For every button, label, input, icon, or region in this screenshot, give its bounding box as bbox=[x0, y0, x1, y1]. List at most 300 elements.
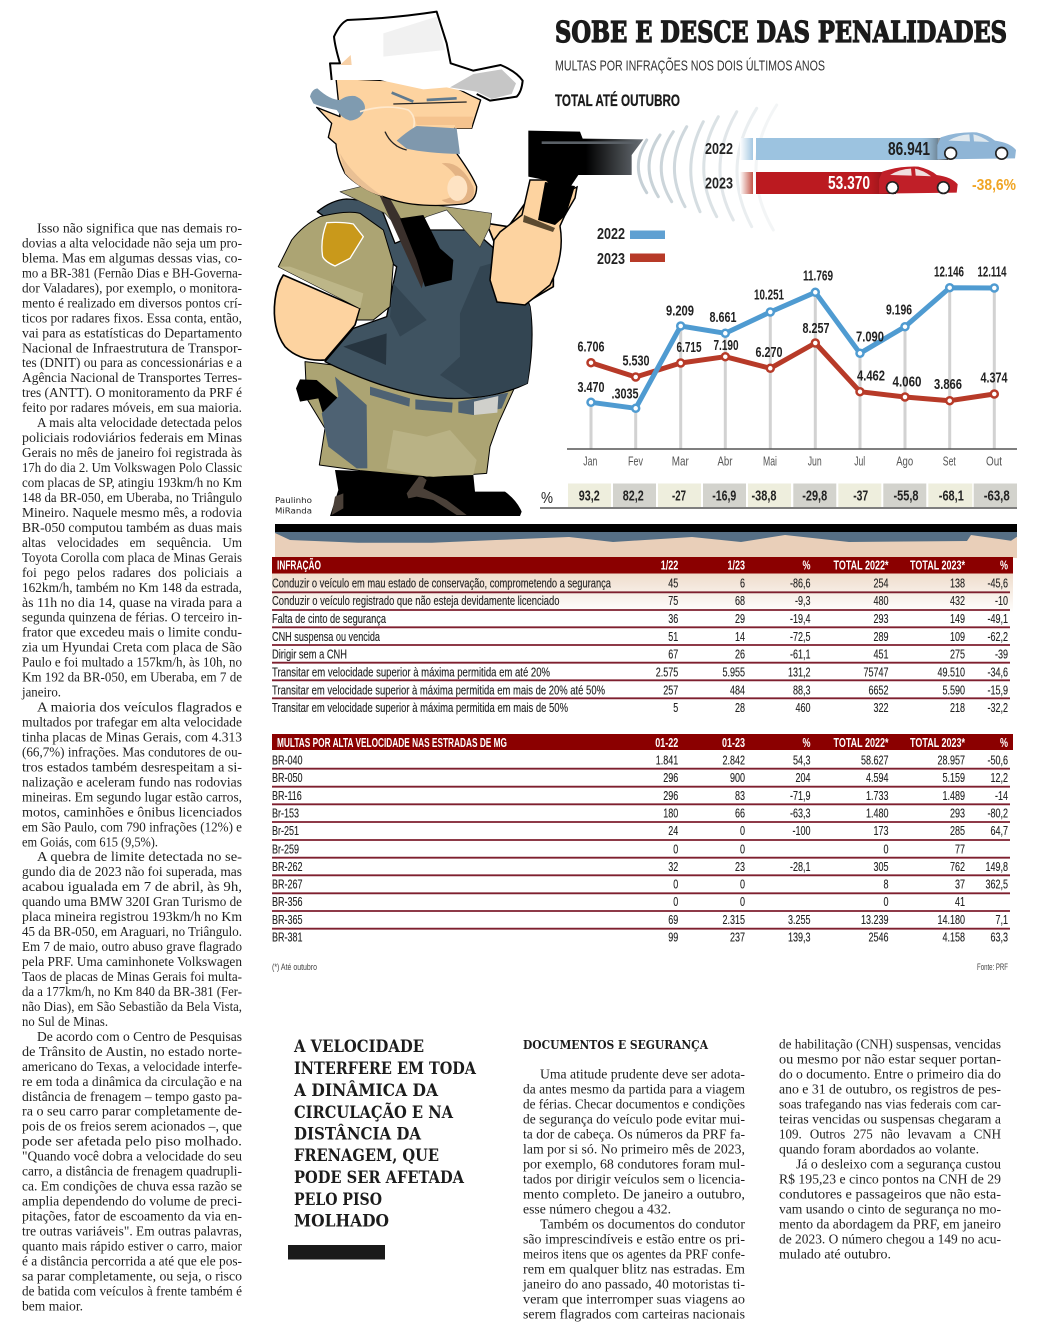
data labels: 4.060 bbox=[892, 374, 922, 390]
row values: 26 bbox=[735, 648, 745, 662]
body text: right column: ou mesmo por não estar sequer portan- bbox=[779, 1052, 1001, 1066]
highway values: 762 bbox=[950, 860, 965, 874]
body text: left column: feito por radares móveis, em sua maioria. bbox=[22, 400, 242, 415]
highway rows: Br-251 bbox=[272, 825, 299, 838]
highway values: 64,7 bbox=[991, 825, 1008, 838]
table header bbox=[272, 557, 1013, 574]
source: Fonte: PRF bbox=[977, 962, 1008, 973]
body text: left column bbox=[21, 220, 243, 1313]
body text: left column: De acordo com o Centro de Pesquisas bbox=[37, 1029, 242, 1044]
percent variation row: -55,8 bbox=[894, 488, 918, 504]
body text: left column: da a 177km/h, no Km 840 da BR-381 (Fer- bbox=[22, 984, 242, 999]
table header: TOTAL 2023* bbox=[910, 736, 966, 750]
body text: left column: em São Paulo, com 790 infrações (12%) e bbox=[22, 819, 242, 834]
month labels: Abr bbox=[718, 454, 732, 468]
table header: TOTAL 2023* bbox=[910, 559, 966, 573]
highway values: 3.255 bbox=[788, 914, 811, 927]
highway rows: BR-050 bbox=[272, 772, 302, 785]
month labels: Jun bbox=[808, 454, 822, 468]
icon: nose and cheek highlight bbox=[447, 176, 467, 201]
illustration: highway patrol officer bbox=[274, 12, 553, 516]
pull quote: A DINÂMICA DA bbox=[293, 1080, 439, 1101]
row values: 451 bbox=[873, 648, 888, 662]
icon: boots bbox=[330, 470, 522, 516]
highway rows: BR-262 bbox=[272, 860, 302, 874]
table header: % bbox=[803, 736, 811, 750]
icon: trousers bbox=[305, 362, 515, 477]
row values: 218 bbox=[950, 702, 965, 715]
percent variation row bbox=[540, 484, 1017, 508]
icon: sleeve and collar bbox=[278, 184, 492, 320]
highway values: 0 bbox=[740, 896, 745, 909]
row values: 480 bbox=[873, 595, 888, 608]
body text: left column: Agência Nacional de Transportes Terres- bbox=[22, 370, 242, 385]
body text: left column: Toyota Corolla com placa de Minas Gerais bbox=[22, 550, 242, 565]
body text: left column: quando uma BMW 320I Gran Turismo de bbox=[22, 894, 242, 909]
body text: left column: placa mineira registrou 193km/h no Km bbox=[22, 909, 243, 924]
row values: 14 bbox=[735, 631, 745, 644]
row values: 67 bbox=[668, 648, 678, 662]
body text: middle column: Também os documentos do condutor bbox=[540, 1216, 746, 1232]
month labels: Mar bbox=[672, 454, 689, 468]
body text: middle column: de férias. Checar documentos e condições bbox=[523, 1096, 745, 1112]
body text: middle column: mento completo. De janeiro a outubro, bbox=[523, 1186, 745, 1202]
line chart: monthly fines bbox=[567, 264, 1017, 468]
row values: -72,5 bbox=[790, 631, 811, 644]
body text: right column: condutores e passageiros que não esta- bbox=[779, 1186, 1001, 1202]
body text: middle column: tados por dirigir veículos sem o licencia- bbox=[523, 1172, 745, 1186]
row values: -45,6 bbox=[988, 577, 1008, 591]
subtitle: MULTAS POR INFRAÇÕES NOS DOIS ÚLTIMOS ANOS bbox=[555, 58, 825, 74]
pull quote: DISTÂNCIA DA bbox=[294, 1124, 422, 1144]
highway values: 296 bbox=[663, 772, 678, 785]
body text: left column: Km 192 da BR-050, em Uberaba, em 7 de bbox=[22, 670, 242, 685]
body text: middle column: Uma atitude prudente deve ser adota- bbox=[540, 1066, 745, 1082]
highway values: 2546 bbox=[868, 931, 888, 945]
series 2023 bbox=[588, 340, 998, 404]
body text: left column: foi pego pelos radares dos policiais a bbox=[22, 565, 242, 580]
highway values: 23 bbox=[735, 860, 745, 874]
body text: left column: Nacional de Infraestrutura de Transpor- bbox=[22, 340, 242, 355]
body text: left column: mineiras. Em segundo lugar estão carros, bbox=[22, 789, 242, 804]
data labels: 8.257 bbox=[802, 321, 830, 337]
credit: illustrator bbox=[275, 496, 312, 516]
pull quote: PODE SER AFETADA bbox=[294, 1168, 465, 1188]
icon: left arm bbox=[274, 275, 360, 360]
footnote: (*) Até outubro bbox=[272, 962, 317, 973]
body text: left column: blema. Mas em algumas dessas vias, co- bbox=[22, 250, 242, 265]
row values: -19,4 bbox=[790, 613, 811, 626]
body text: middle column: são imprescindíveis e estão entre os pri- bbox=[523, 1232, 745, 1246]
highway values: 0 bbox=[740, 825, 745, 838]
highway rows: BR-381 bbox=[272, 931, 302, 945]
table header: TOTAL 2022* bbox=[834, 559, 889, 573]
data labels: 9.196 bbox=[886, 302, 912, 318]
highway values: 37 bbox=[955, 878, 965, 892]
data labels bbox=[578, 264, 1008, 402]
data labels: 11.769 bbox=[803, 268, 833, 284]
body text: left column: Paulo e foi multado a 157km/h, às 10h, no bbox=[22, 655, 242, 670]
row values: 5.590 bbox=[943, 684, 965, 698]
percent variation row: -29,8 bbox=[802, 488, 827, 504]
body text: left column: ra o seu carro parar completamente de- bbox=[22, 1104, 242, 1119]
highway values: 204 bbox=[796, 772, 811, 785]
highway values: 2.842 bbox=[722, 754, 745, 768]
icon: right arm bbox=[487, 187, 553, 302]
data labels: 6.270 bbox=[756, 345, 782, 361]
body text: left column: é a distância percorrida a até que ele pos- bbox=[22, 1253, 242, 1268]
body text: left column: BR-050 computou também as duas mais bbox=[22, 520, 242, 535]
radar waves bbox=[638, 105, 777, 230]
body text: left column: com placas de SP, atingiu 193km/h no Km bbox=[22, 475, 243, 490]
icon: blue car bbox=[937, 132, 1016, 160]
body text: left column: A mais alta velocidade detectada pelos bbox=[37, 415, 242, 430]
section heading: documents and safety: DOCUMENTOS E SEGURANÇA bbox=[523, 1038, 709, 1052]
body text: left column: tros estados também desrespeitam a si- bbox=[22, 759, 242, 774]
row labels: Transitar em velocidade superior à máxima permitida em mais de 50% bbox=[272, 701, 568, 715]
highway values: 63,3 bbox=[991, 931, 1008, 945]
icon: red car bbox=[879, 167, 958, 194]
highway values: 83 bbox=[735, 790, 745, 803]
pull quote: MOLHADO bbox=[294, 1212, 389, 1232]
table header: % bbox=[1000, 559, 1008, 573]
highway values: 41 bbox=[955, 896, 965, 909]
row values: 2.575 bbox=[656, 666, 678, 680]
table header: 01-23 bbox=[722, 736, 745, 750]
body text: right column: Já o desleixo com a segurança custou bbox=[796, 1156, 1001, 1172]
body text: right column: 109. Outros 275 não levavam a CNH bbox=[779, 1126, 1001, 1142]
variation: total percent: -38,6% bbox=[972, 177, 1016, 194]
percent variation row: -16,9 bbox=[712, 488, 736, 504]
row values: 254 bbox=[873, 577, 888, 591]
body text: left column: zia um Hyundai Creta com placa de São bbox=[22, 640, 242, 655]
data labels: 10.251 bbox=[754, 288, 784, 304]
highway values: 0 bbox=[673, 878, 678, 892]
highway values: 173 bbox=[873, 825, 888, 838]
month labels: Fev bbox=[628, 454, 644, 468]
data labels: 4.462 bbox=[857, 368, 885, 384]
body text: left column: sa parar completamente, ou seja, o risco bbox=[22, 1268, 242, 1283]
highway values: 180 bbox=[663, 807, 678, 821]
bar: total 2023: 2023 bbox=[705, 176, 733, 192]
body text: left column: 162km/h, também no Km 148 da estrada, bbox=[22, 580, 242, 595]
icon: forearm and hand holding radar bbox=[490, 180, 577, 305]
highway values: 237 bbox=[730, 931, 745, 945]
highway values: 0 bbox=[883, 843, 888, 857]
body text: middle column: rem em qualquer blitz nas estradas. Em bbox=[523, 1262, 746, 1276]
row labels: Conduzir o veículo em mau estado de conservação, comprometendo a segurança bbox=[272, 576, 611, 590]
highway values: 32 bbox=[668, 860, 678, 874]
credit: illustrator: MiRanda bbox=[275, 506, 312, 516]
row values: 28 bbox=[735, 702, 745, 715]
body text: left column: mo a BR-381 (Fernão Dias e BH-Governa- bbox=[22, 265, 242, 280]
bar: total 2022: 86.941 bbox=[888, 139, 930, 159]
highway values: 0 bbox=[740, 878, 745, 892]
pull quote: CIRCULAÇÃO E NA bbox=[294, 1101, 454, 1123]
highway values: 5.159 bbox=[943, 772, 965, 785]
table header bbox=[272, 734, 1013, 750]
body text: left column: multados por trafegar em alta velocidade bbox=[22, 714, 242, 730]
row values: 149 bbox=[950, 613, 965, 626]
body text: middle column: serem flagrados com carteiras nacionais bbox=[523, 1306, 745, 1322]
body text: left column: dovias a alta velocidade não seja um pro- bbox=[22, 236, 242, 250]
highway rows: BR-356 bbox=[272, 896, 302, 909]
highway rows: BR-116 bbox=[272, 790, 302, 803]
row labels: Transitar em velocidade superior à máxima permitida em mais de 20% até 50% bbox=[272, 684, 605, 698]
highway values: 2.315 bbox=[722, 914, 745, 927]
table: fines by infraction bbox=[272, 557, 1013, 715]
table header: INFRAÇÃO bbox=[277, 558, 321, 572]
highway values: 0 bbox=[673, 843, 678, 857]
body text: left column: re em toda a dinâmica da circulação e na bbox=[22, 1074, 242, 1089]
body text: left column: janeiro. bbox=[21, 685, 61, 700]
body text: right column: ano e 31 de outubro, os registros de pes- bbox=[779, 1082, 1001, 1096]
body text: left column: gundo dia de 2023 não foi superada, mas bbox=[22, 864, 242, 879]
row values: -9,3 bbox=[795, 595, 811, 608]
body text: left column: pitações, fator de escoamento da via en- bbox=[22, 1208, 242, 1224]
highway values: 12,2 bbox=[991, 772, 1008, 785]
highway values: -14 bbox=[995, 790, 1008, 803]
highway values: 24 bbox=[668, 825, 678, 838]
body text: left column: Isso não significa que nas demais ro- bbox=[37, 220, 242, 236]
highway rows bbox=[272, 754, 302, 945]
body text: left column: tinha placas de Minas Gerais, com 4.313 bbox=[22, 730, 242, 744]
pull quote: A VELOCIDADE bbox=[293, 1037, 424, 1057]
percent variation row: -63,8 bbox=[984, 488, 1010, 504]
body text: left column: vai para as estatísticas do Departamento bbox=[22, 325, 242, 340]
body text: middle column: da antes mesmo da partida para a viagem bbox=[523, 1082, 746, 1096]
highway values: 14.180 bbox=[938, 914, 965, 927]
body text: left column: pela PRF. Uma caminhonete Volkswagen bbox=[22, 954, 242, 969]
body text: right column: do o documento. Entre o primeiro dia do bbox=[779, 1066, 1001, 1082]
body text: right column: R$ 195,23 e cinco pontos na CNH de 29 bbox=[779, 1172, 1001, 1186]
body text: left column: às 11h no dia 14, quase na virada para a bbox=[22, 595, 242, 610]
row values: -10 bbox=[995, 595, 1008, 608]
body text: left column: tes (DNIT) ou para as concessionárias e a bbox=[22, 355, 242, 370]
percent variation row: -37 bbox=[853, 488, 868, 504]
row values bbox=[656, 577, 1008, 715]
table header: % bbox=[1000, 736, 1008, 750]
highway rows: BR-267 bbox=[272, 878, 302, 892]
body text: left column: frator que excedeu mais o limite condu- bbox=[22, 625, 242, 640]
row values: -49,1 bbox=[988, 613, 1008, 626]
body text: left column: nalização e aceleram fundo nas rodovias bbox=[22, 774, 242, 789]
row values: 275 bbox=[950, 648, 965, 662]
highway values: 99 bbox=[668, 931, 678, 945]
row labels: Dirigir sem a CNH bbox=[272, 648, 347, 662]
row values: 293 bbox=[873, 613, 888, 626]
highway rows: Br-259 bbox=[272, 843, 299, 857]
highway values: 305 bbox=[873, 860, 888, 874]
data labels: 7.190 bbox=[714, 338, 738, 354]
table: speeding fines by highway bbox=[272, 734, 1013, 945]
icon: radar gun bbox=[528, 131, 643, 195]
highway values: 296 bbox=[663, 790, 678, 803]
data labels: 7.090 bbox=[856, 330, 884, 346]
table header: TOTAL 2022* bbox=[834, 736, 889, 750]
percent variation row: 82,2 bbox=[623, 488, 644, 504]
body text: middle column bbox=[522, 1066, 746, 1322]
body text: middle column: veram que interromper suas viagens ao bbox=[523, 1292, 745, 1306]
highway values: 28.957 bbox=[938, 754, 965, 768]
row values: 5 bbox=[673, 702, 678, 715]
body text: right column: mulado até outubro. bbox=[779, 1246, 891, 1262]
chart legend: 2022 bbox=[597, 226, 625, 243]
body text: middle column: ta dor de cabeça. Os números da PRF fa- bbox=[523, 1126, 745, 1142]
data labels: 12.146 bbox=[934, 264, 964, 280]
row values: 88,3 bbox=[793, 684, 811, 698]
highway values: 1.480 bbox=[866, 807, 888, 821]
highway values: -71,9 bbox=[790, 790, 811, 803]
body text: left column: 148 da BR-050, em Uberaba, no Triângulo bbox=[22, 490, 242, 505]
body text: middle column: lam por si só. No primeiro mês de 2023, bbox=[523, 1142, 745, 1156]
pull quote bbox=[288, 1037, 477, 1260]
row values: 29 bbox=[735, 613, 745, 626]
body text: left column: distância de frenagem – tempo gasto pa- bbox=[22, 1089, 242, 1104]
data labels: 3.470 bbox=[578, 380, 604, 396]
body text: left column: carro, a distância de frenagem quadrupli- bbox=[22, 1164, 242, 1179]
row labels: Falta de cinto de segurança bbox=[272, 612, 386, 626]
highway values: 0 bbox=[740, 843, 745, 857]
highway values: 7,1 bbox=[996, 914, 1008, 927]
row values: -15,9 bbox=[988, 684, 1008, 698]
decorative road band bbox=[275, 524, 1017, 558]
row values: -61,1 bbox=[790, 648, 811, 662]
body text: left column: pois de os freios serem acionados –, que bbox=[22, 1119, 242, 1134]
body text: left column: amplia dependendo do volume de preci- bbox=[22, 1194, 242, 1209]
highway values: 8 bbox=[883, 878, 888, 892]
body text: right column: mento da abordagem da PRF, em janeiro bbox=[779, 1216, 1001, 1232]
row labels: Conduzir o veículo registrado que não esteja devidamente licenciado bbox=[272, 594, 560, 608]
row values: 6 bbox=[740, 577, 745, 591]
body text: left column: pode ser afetada pelo piso molhado. bbox=[22, 1134, 242, 1149]
highway values: -100 bbox=[793, 825, 811, 838]
highway values: 293 bbox=[950, 807, 965, 821]
body text: right column bbox=[779, 1036, 1001, 1262]
highway values: 69 bbox=[668, 914, 678, 927]
body text: left column: no Sul de Minas. bbox=[22, 1014, 108, 1029]
body text: left column: (66,7%) infrações. Mas condutores de ou- bbox=[22, 744, 242, 760]
credit: illustrator: Paulinho bbox=[275, 496, 312, 505]
body text: left column: Em 7 de maio, outro abuso grave flagrado bbox=[22, 939, 242, 954]
body text: left column: Gerais no mês de janeiro foi registrada às bbox=[22, 445, 242, 460]
month labels: Mai bbox=[763, 454, 777, 468]
chart legend: 2023 bbox=[597, 251, 625, 268]
body text: middle column: meiros itens que os agentes da PRF confe- bbox=[523, 1246, 745, 1262]
percent variation row: -68,1 bbox=[939, 488, 964, 504]
row values: 5.955 bbox=[722, 666, 745, 680]
highway values: 13.239 bbox=[861, 914, 888, 927]
highway values: -28,1 bbox=[790, 860, 811, 874]
row labels: Transitar em velocidade superior à máxima permitida em até 20% bbox=[272, 666, 550, 680]
row values: -32,2 bbox=[988, 702, 1008, 715]
month labels: Set bbox=[943, 454, 956, 468]
row values: 36 bbox=[668, 613, 678, 626]
month labels: Jul bbox=[854, 454, 865, 468]
icon: holster and pistol bbox=[296, 377, 367, 468]
highway values: 0 bbox=[673, 896, 678, 909]
row values: 6652 bbox=[868, 684, 888, 698]
pull quote bar bbox=[288, 1245, 385, 1260]
row values: 322 bbox=[873, 702, 888, 715]
highway values: 1.841 bbox=[656, 754, 678, 768]
row values: 75747 bbox=[863, 666, 888, 680]
data labels: 6.715 bbox=[676, 340, 702, 356]
body text: right column: teiras vencidas ou suspensas chegaram a bbox=[779, 1112, 1001, 1126]
row values: 75 bbox=[668, 595, 678, 608]
body text: left column: Taos de placas de Minas Gerais foi multa- bbox=[22, 969, 242, 984]
data labels: 3.866 bbox=[934, 377, 962, 393]
body text: left column: ca. Em condições de chuva essa razão se bbox=[22, 1179, 242, 1194]
highway values: -80,2 bbox=[988, 807, 1008, 821]
highway values: 900 bbox=[730, 772, 745, 785]
data labels: .3035 bbox=[612, 386, 638, 402]
table header: 1/23 bbox=[727, 559, 745, 573]
body text: left column: policiais rodoviários federais em Minas bbox=[22, 430, 242, 445]
row values: -39 bbox=[995, 648, 1008, 662]
highway values: 139,3 bbox=[788, 931, 811, 945]
data labels: 6.706 bbox=[578, 340, 604, 356]
body text: left column: 17h do dia 2. Um Volkswagen Polo Classic bbox=[22, 460, 242, 475]
row values: 257 bbox=[663, 684, 678, 698]
highway rows: BR-040 bbox=[272, 754, 302, 768]
icon: head bbox=[317, 78, 481, 205]
row values: 484 bbox=[730, 684, 745, 698]
body text: left column: tres (ANTT). O monitoramento da PRF é bbox=[22, 385, 242, 400]
icon: glasses arm bbox=[360, 107, 414, 128]
pull quote: FRENAGEM, QUE bbox=[294, 1146, 439, 1166]
body text: left column: Mineiro. Naquele mesmo mês, a rodovia bbox=[22, 505, 242, 520]
row values: 432 bbox=[950, 595, 965, 608]
bar: total 2023 bbox=[705, 167, 1016, 194]
highway values: 1.489 bbox=[943, 790, 965, 803]
body text: right column: vam usando o cinto de segurança no mo- bbox=[779, 1202, 1001, 1216]
body text: left column: A quebra de limite detectada no se- bbox=[37, 849, 242, 864]
month labels bbox=[583, 454, 1002, 468]
body text: left column: acabou igualada em 7 de abril, às 9h, bbox=[22, 879, 242, 894]
highway values: -50,6 bbox=[988, 754, 1008, 768]
row values: 68 bbox=[735, 595, 745, 608]
body text: right column: soas trafegando nas vias federais com car- bbox=[779, 1096, 1001, 1112]
row labels bbox=[272, 576, 611, 715]
bar: total 2022: 2022 bbox=[705, 141, 733, 158]
month labels: Ago bbox=[896, 454, 913, 468]
body text: left column: tre outras variáveis". Em outras palavras, bbox=[22, 1224, 242, 1238]
bar: total 2023: 53.370 bbox=[828, 173, 870, 193]
highway values: 58.627 bbox=[861, 754, 888, 768]
highway values: 66 bbox=[735, 807, 745, 821]
body text: middle column: esse número chegou a 432. bbox=[523, 1202, 671, 1216]
chart legend bbox=[597, 226, 665, 268]
icon: radio bbox=[371, 174, 453, 288]
highway values: 149,8 bbox=[986, 860, 1008, 874]
icon: belt bbox=[370, 387, 508, 415]
highway values: -63,3 bbox=[790, 807, 811, 821]
data labels: 4.374 bbox=[980, 370, 1008, 386]
highway values: 77 bbox=[955, 843, 965, 857]
row values: 45 bbox=[668, 577, 678, 591]
body text: right column: de 2023. O número chegou a 149 no acu- bbox=[779, 1232, 1001, 1246]
percent variation row: 93,2 bbox=[579, 488, 600, 504]
table header: 1/22 bbox=[661, 559, 678, 573]
percent variation row: -38,8 bbox=[752, 488, 776, 504]
body text: middle column: de segurança do veículo pode evitar mui- bbox=[523, 1112, 745, 1126]
heading: total until October: TOTAL ATÉ OUTUBRO bbox=[555, 91, 680, 110]
body text: left column: A maioria dos veículos flagrados e bbox=[37, 700, 242, 714]
highway values: 285 bbox=[950, 825, 965, 838]
icon: sideburn hair bbox=[310, 88, 365, 121]
body text: left column: quanto mais rápido estiver o carro, maior bbox=[22, 1238, 243, 1254]
